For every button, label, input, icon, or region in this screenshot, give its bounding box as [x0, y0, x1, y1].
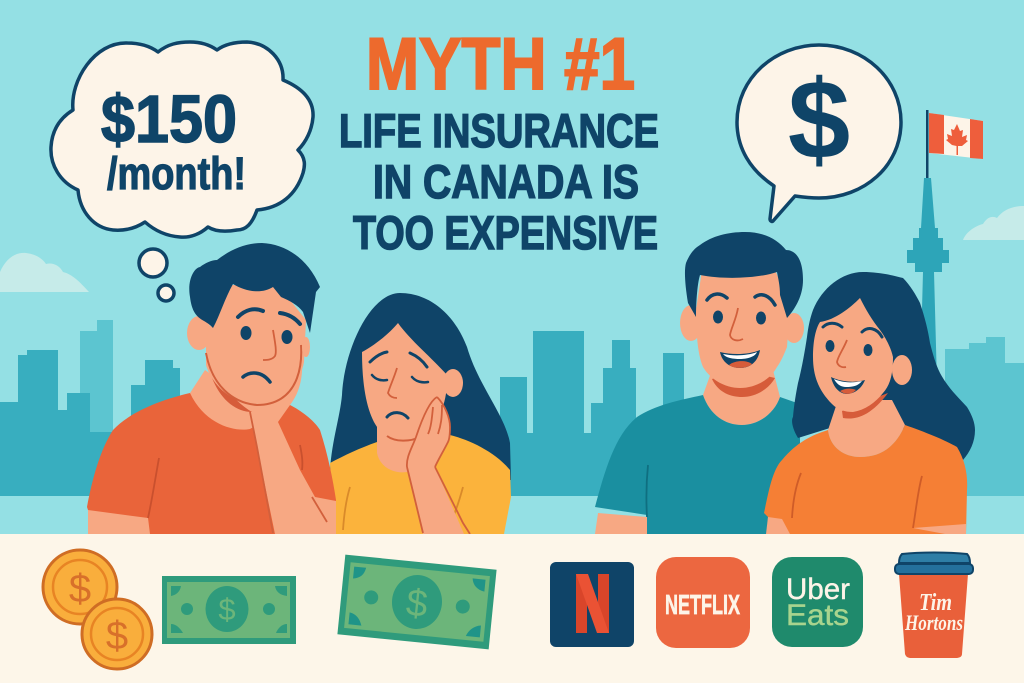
worried woman — [330, 293, 511, 534]
speech bubble with dollar — [737, 45, 901, 221]
neck — [703, 370, 780, 425]
happy woman — [764, 272, 975, 534]
icon: coffee cup: Hortons — [904, 610, 963, 635]
jaw shadow line — [206, 345, 301, 405]
subtitle line 1: LIFE INSURANCE — [339, 104, 659, 157]
subtitle line 2: IN CANADA IS — [373, 155, 639, 208]
neck — [377, 425, 425, 472]
tower — [907, 178, 949, 420]
coin back: $ — [69, 567, 91, 611]
sleeve fold — [646, 465, 648, 517]
icon: N app tile — [550, 562, 634, 647]
sleeve folds — [343, 487, 463, 530]
ears — [680, 305, 702, 341]
neck — [828, 400, 905, 457]
icon: coffee cup — [895, 552, 973, 658]
icon: dollar bill straight: $ — [218, 592, 236, 627]
chin shadow — [712, 370, 775, 397]
orange shirt — [87, 393, 336, 534]
ear — [187, 316, 211, 350]
title — [339, 24, 659, 259]
hand and arm — [407, 397, 464, 534]
arm left — [766, 517, 790, 534]
cup brand text: Tim — [919, 590, 952, 616]
face — [206, 285, 306, 404]
icon: Uber Eats app tile: Eats — [786, 599, 849, 632]
eyebrows — [238, 309, 300, 324]
myth heading: MYTH #1 — [366, 24, 635, 105]
arm under sleeve — [595, 513, 647, 534]
icon: Uber Eats app tile: Uber — [786, 573, 850, 606]
subtitle line 3: TOO EXPENSIVE — [353, 206, 658, 259]
bottom panel — [0, 534, 1024, 683]
sleeve folds — [148, 445, 302, 518]
long hair — [792, 272, 975, 460]
chin shadow — [210, 372, 252, 412]
ear — [892, 355, 912, 385]
thought dot large — [139, 249, 167, 277]
skyline: back left and right lighter buildings — [80, 320, 1024, 496]
icon: Netflix app tile: NETFLIX — [665, 589, 740, 620]
ear — [443, 369, 463, 397]
coin front: $ — [106, 614, 128, 658]
eyebrows — [823, 323, 882, 337]
cloud: left — [0, 253, 89, 292]
ear right — [302, 337, 310, 357]
dollar sign: $ — [788, 57, 850, 182]
yellow shirt — [330, 435, 511, 534]
orange shirt — [764, 425, 967, 534]
sad mouth — [243, 373, 270, 382]
icon: dollar bill straight — [162, 576, 296, 644]
worried man — [87, 243, 336, 534]
face — [813, 298, 893, 412]
nose — [263, 330, 276, 360]
sad mouth — [387, 413, 408, 418]
per month: /month! — [107, 148, 246, 199]
icon: gold coins — [43, 550, 152, 669]
nose — [730, 308, 743, 340]
flag — [929, 113, 983, 159]
smile — [720, 350, 760, 368]
nose — [388, 368, 397, 398]
chin shadow — [842, 393, 888, 419]
teal shirt — [595, 395, 800, 534]
icon: dollar bill tilted: $ — [404, 582, 429, 626]
CN Tower with Canadian flag — [907, 110, 983, 420]
face — [696, 270, 790, 388]
long hair — [330, 293, 511, 480]
eyes — [713, 310, 723, 324]
hair — [685, 232, 803, 318]
eyes — [826, 340, 834, 352]
cloud: right — [963, 206, 1024, 240]
icon: dollar bill tilted — [337, 555, 497, 649]
chin line — [387, 436, 420, 441]
icon: Uber Eats app tile — [772, 557, 863, 647]
eyebrows — [707, 294, 775, 305]
price: $150 — [101, 82, 237, 157]
sleeve folds — [792, 473, 922, 528]
forearm and hand — [250, 363, 336, 534]
maple leaf — [946, 124, 968, 155]
eyes — [240, 326, 252, 340]
closed eyes — [372, 375, 428, 382]
icon: Netflix app tile — [656, 557, 750, 648]
neck — [190, 370, 262, 431]
cup body — [899, 574, 968, 658]
left arm under sleeve — [88, 510, 150, 534]
lid — [895, 552, 973, 574]
arm right — [913, 524, 966, 534]
happy man — [595, 232, 804, 534]
smile — [831, 377, 865, 394]
hair — [189, 243, 320, 333]
nose — [837, 340, 847, 367]
thought dot small — [158, 285, 174, 301]
thought bubble cloud — [51, 42, 313, 237]
face — [362, 323, 447, 440]
eyebrows — [370, 352, 427, 367]
flag pole — [926, 110, 928, 178]
skyline: darker buildings — [0, 331, 684, 496]
